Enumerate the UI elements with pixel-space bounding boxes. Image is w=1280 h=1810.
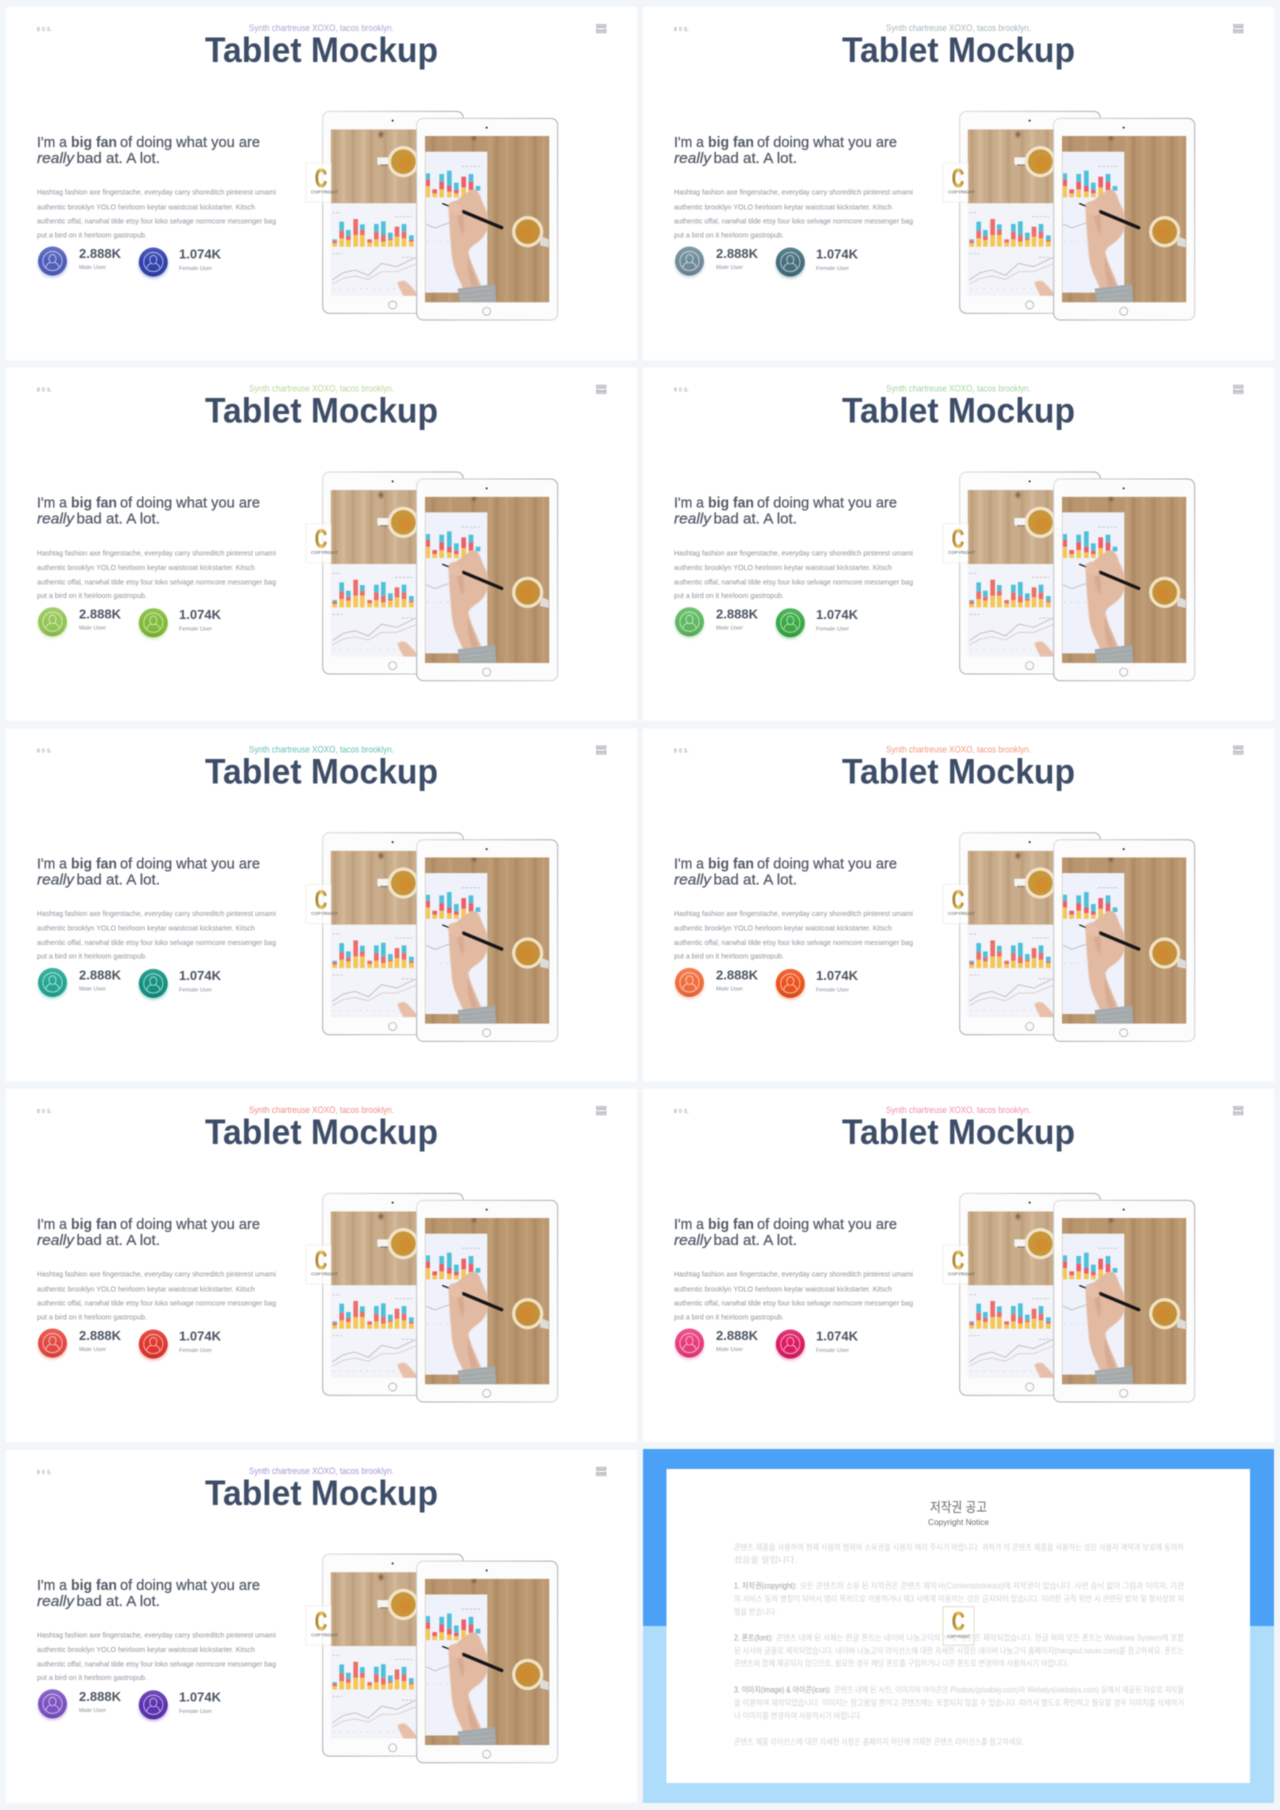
stat: male user: [79, 246, 122, 271]
stat: female user: 1.074K: [816, 246, 859, 262]
notice section 1: copyright: 의 서비스 등의 명칭이 되어서 영리 목적으로 이용하거나 제3 사에게 이용하는 것은 금지되어 있습니다. 이러한 규칙 위반 시 관련된 법적 및 형사상의 처: [734, 1594, 1184, 1604]
body text: [674, 548, 913, 600]
stat: male user: Male User: [716, 265, 743, 271]
copyright logo: C: [315, 1245, 327, 1275]
heading: I'm a: [674, 855, 705, 872]
copyright logo: C: [315, 884, 327, 914]
heading: really: [37, 871, 76, 888]
panel: tablet mockup slide 8 (pink): [643, 1089, 1274, 1442]
copyright logo: COPYRIGHT: [311, 550, 338, 555]
stat: female user: Female User: [179, 266, 212, 272]
notice section 2: font: 콘텐츠와 함께 제공되지 않으므로, 필요한 경우 해당 폰트를 구입하거나 다른 폰트로 변경하여 사용하시기 바랍니다.: [734, 1658, 1069, 1668]
heading: [674, 495, 897, 528]
panel: copyright notice: [643, 1449, 1274, 1803]
heading: I'm a: [37, 855, 68, 872]
stat: female user: Female User: [179, 627, 212, 633]
copyright logo: [306, 524, 338, 563]
body text: authentic offal, narwhal tilde etsy four loko selvage normcore messenger bag: [37, 577, 276, 586]
panel: tablet mockup slide 7 (red): [6, 1089, 637, 1442]
copyright logo: COPYRIGHT: [948, 190, 975, 194]
body text: Hashtag fashion axe fingerstache, everyday carry shoreditch pinterest umami: [37, 548, 276, 557]
notice section 2: font: 콘텐츠 내에 된 서체는 한글 폰트는 네이버 나눔고딕의 서체, 영문은 제작되었습니다. 한글 외의 모든 폰트는 Windows System에 포함: [776, 1632, 1185, 1642]
heading: I'm a: [37, 1577, 68, 1594]
body text: put a bird on it heirloom gastropub.: [37, 1312, 147, 1321]
body text: Hashtag fashion axe fingerstache, everyday carry shoreditch pinterest umami: [674, 188, 913, 197]
stat: female user: 1.074K: [179, 1328, 222, 1344]
title: Tablet Mockup: [842, 1113, 1075, 1152]
heading: bad at. A lot.: [714, 511, 797, 528]
heading: [37, 1216, 260, 1249]
heading: big fan: [71, 495, 117, 512]
stat: female user: Female User: [816, 1348, 849, 1354]
copyright logo: [943, 1606, 974, 1645]
title: Tablet Mockup: [842, 752, 1075, 791]
stat: female user: Female User: [816, 987, 849, 993]
notice section 2: font: [734, 1632, 1185, 1668]
icon: male user: [38, 968, 67, 998]
heading: I'm a: [37, 134, 68, 151]
body text: Hashtag fashion axe fingerstache, everyday carry shoreditch pinterest umami: [674, 909, 913, 918]
stat: male user: 2.888K: [79, 1328, 122, 1343]
heading: really: [37, 511, 76, 528]
icon: stack menu: [596, 1467, 606, 1476]
notice section 3: image and icon: 콘텐츠 내에 된 사진, 이미지와 아이콘은 Pixabay(pixabay.com)와 Webalys(webalys.com) 등에서 제공된 자료로 저작물: [834, 1684, 1184, 1694]
heading: really: [674, 871, 713, 888]
heading: of doing what you are: [120, 855, 260, 872]
copyright logo: C: [952, 1245, 964, 1275]
notice section 3: image and icon: [734, 1684, 1184, 1720]
stat: male user: 2.888K: [79, 246, 122, 261]
icon: female user: [139, 248, 168, 278]
stat: female user: [179, 607, 222, 633]
body text: [674, 1270, 913, 1321]
icon: stack menu: [1234, 24, 1243, 33]
stat: female user: Female User: [179, 987, 212, 993]
page number: 8 0 S.: [37, 388, 52, 394]
copyright logo: [306, 1245, 338, 1284]
stat: female user: Female User: [179, 1348, 212, 1354]
panel: tablet mockup slide 9 (purple): [6, 1450, 637, 1803]
title: Tablet Mockup: [842, 392, 1075, 431]
copyright logo: C: [952, 524, 964, 554]
copyright logo: [943, 1245, 975, 1284]
stat: male user: 2.888K: [716, 967, 759, 982]
stat: female user: 1.074K: [816, 607, 859, 622]
notice section 3: image and icon: 3. 이미지(image) & 아이콘(icon):: [734, 1684, 831, 1694]
icon: male user: [675, 246, 704, 277]
stat: female user: 1.074K: [179, 1689, 222, 1704]
notice section 1: copyright: 벌을 받습니다.: [734, 1606, 777, 1616]
heading: of doing what you are: [120, 495, 260, 512]
icon: stack menu: [1234, 746, 1243, 754]
heading: of doing what you are: [757, 495, 897, 512]
body text: put a bird on it heirloom gastropub.: [37, 591, 147, 600]
body text: authentic brooklyn YOLO heirloom keytar waistcoat kickstarter. Kitsch: [37, 1284, 255, 1293]
icon: male user: [38, 1689, 67, 1720]
heading: [37, 1577, 260, 1610]
stat: female user: [179, 968, 222, 993]
heading: really: [37, 1232, 76, 1249]
body text: authentic brooklyn YOLO heirloom keytar waistcoat kickstarter. Kitsch: [37, 1645, 255, 1654]
stat: male user: [79, 1689, 122, 1714]
tablet mockup: [323, 833, 558, 1041]
copyright logo: COPYRIGHT: [311, 190, 338, 194]
body text: authentic offal, narwhal tilde etsy four loko selvage normcore messenger bag: [37, 217, 276, 226]
heading: bad at. A lot.: [76, 511, 160, 528]
stat: male user: 2.888K: [716, 1328, 759, 1343]
heading: bad at. A lot.: [76, 1593, 160, 1610]
body text: authentic brooklyn YOLO heirloom keytar waistcoat kickstarter. Kitsch: [674, 563, 892, 572]
notice intro: 콘텐츠 제품을 사용하여 현재 사용의 범위와 소유권을 사용자 여러 주시기 바랍니다. 귀하가 이 콘텐츠 제품을 사용하는 것은 사용자 계약과 보호에 동의하: [734, 1542, 1185, 1552]
icon: female user: [776, 248, 805, 278]
icon: female user: [776, 608, 805, 639]
title: Tablet Mockup: [205, 392, 438, 431]
body text: authentic offal, narwhal tilde etsy four loko selvage normcore messenger bag: [37, 938, 276, 947]
heading: big fan: [71, 855, 117, 872]
stat: female user: 1.074K: [179, 607, 222, 622]
body text: put a bird on it heirloom gastropub.: [674, 230, 784, 239]
icon: male user: [675, 607, 704, 638]
copyright logo: C: [952, 884, 964, 914]
stat: male user: [79, 967, 122, 992]
heading: really: [37, 150, 76, 167]
heading: bad at. A lot.: [714, 1232, 797, 1249]
page number: 8 0 S.: [37, 27, 52, 33]
stat: female user: [179, 246, 222, 272]
body text: authentic offal, narwhal tilde etsy four loko selvage normcore messenger bag: [674, 217, 913, 226]
body text: [37, 1630, 276, 1682]
panel: tablet mockup slide 5 (teal): [6, 728, 637, 1081]
copyright logo: C: [315, 1606, 327, 1636]
heading: I'm a: [674, 1216, 705, 1233]
stat: female user: Female User: [816, 266, 849, 272]
subtitle: Synth chartreuse XOXO, tacos brooklyn.: [249, 384, 394, 395]
icon: male user: [38, 1328, 67, 1359]
stat: male user: [716, 1328, 759, 1353]
tablet mockup: [323, 1193, 558, 1402]
heading: really: [674, 511, 713, 528]
stat: male user: Male User: [79, 265, 106, 271]
stat: female user: [179, 1689, 222, 1715]
stat: female user: 1.074K: [179, 968, 222, 983]
tablet mockup: [323, 111, 558, 320]
body text: [37, 548, 276, 600]
icon: male user: [675, 1328, 704, 1359]
tablet mockup: [960, 111, 1195, 320]
subtitle: Synth chartreuse XOXO, tacos brooklyn.: [249, 1466, 394, 1477]
body text: authentic brooklyn YOLO heirloom keytar waistcoat kickstarter. Kitsch: [37, 202, 255, 211]
body text: authentic offal, narwhal tilde etsy four loko selvage normcore messenger bag: [674, 938, 913, 947]
copyright logo: C: [315, 524, 327, 554]
heading: big fan: [71, 1577, 117, 1594]
heading: big fan: [708, 855, 754, 872]
body text: [674, 909, 913, 961]
subtitle: Synth chartreuse XOXO, tacos brooklyn.: [886, 384, 1031, 395]
stat: male user: [716, 607, 759, 632]
body text: [37, 909, 276, 961]
notice subheading: Copyright Notice: [928, 1517, 989, 1527]
body text: [37, 1270, 276, 1321]
heading: really: [674, 1232, 713, 1249]
heading: big fan: [708, 1216, 754, 1233]
body text: authentic brooklyn YOLO heirloom keytar waistcoat kickstarter. Kitsch: [674, 202, 892, 211]
stat: male user: [716, 246, 759, 271]
body text: authentic offal, narwhal tilde etsy four loko selvage normcore messenger bag: [674, 577, 913, 586]
body text: put a bird on it heirloom gastropub.: [37, 1673, 147, 1682]
stat: male user: [79, 607, 122, 632]
body text: Hashtag fashion axe fingerstache, everyday carry shoreditch pinterest umami: [37, 188, 276, 197]
heading: bad at. A lot.: [76, 871, 160, 888]
copyright logo: COPYRIGHT: [311, 1272, 338, 1276]
subtitle: Synth chartreuse XOXO, tacos brooklyn.: [249, 23, 394, 34]
notice intro: 셨음을 알립니다.: [734, 1554, 797, 1564]
tablet mockup: [323, 1554, 558, 1763]
stat: male user: 2.888K: [79, 1689, 122, 1704]
notice section 3: image and icon: 나 이미지를 변경하여 사용하시기 바랍니다.: [734, 1710, 862, 1720]
body text: authentic offal, narwhal tilde etsy four loko selvage normcore messenger bag: [37, 1660, 276, 1669]
body text: [37, 188, 276, 239]
title: Tablet Mockup: [205, 752, 438, 791]
tablet mockup: [960, 1193, 1195, 1402]
icon: male user: [38, 607, 67, 638]
body text: Hashtag fashion axe fingerstache, everyday carry shoreditch pinterest umami: [37, 1631, 276, 1640]
heading: I'm a: [674, 134, 705, 151]
copyright logo: [306, 884, 338, 923]
body text: put a bird on it heirloom gastropub.: [37, 952, 147, 961]
stat: male user: 2.888K: [79, 967, 122, 982]
heading: big fan: [708, 134, 754, 151]
body text: Hashtag fashion axe fingerstache, everyday carry shoreditch pinterest umami: [674, 1270, 913, 1279]
heading: [37, 855, 260, 888]
page number: 8 0 S.: [674, 27, 689, 33]
stat: male user: Male User: [716, 626, 743, 632]
heading: of doing what you are: [757, 855, 897, 872]
subtitle: Synth chartreuse XOXO, tacos brooklyn.: [886, 1105, 1031, 1116]
body text: put a bird on it heirloom gastropub.: [674, 1312, 784, 1321]
body text: authentic brooklyn YOLO heirloom keytar waistcoat kickstarter. Kitsch: [674, 1284, 892, 1293]
heading: bad at. A lot.: [714, 150, 797, 167]
notice intro: [734, 1542, 1185, 1564]
panel: tablet mockup slide 1 (indigo): [6, 7, 637, 360]
stat: female user: [816, 246, 859, 272]
title: Tablet Mockup: [205, 1474, 438, 1513]
copyright logo: [306, 163, 338, 202]
body text: authentic brooklyn YOLO heirloom keytar waistcoat kickstarter. Kitsch: [37, 924, 255, 933]
body text: put a bird on it heirloom gastropub.: [674, 952, 784, 961]
copyright logo: COPYRIGHT: [948, 550, 975, 555]
icon: female user: [139, 1330, 168, 1360]
copyright logo: COPYRIGHT: [311, 1632, 338, 1637]
stat: female user: 1.074K: [816, 968, 859, 983]
notice section 1: copyright: 모든 콘텐츠의 소유 된 저작권은 콘텐츠 제작사(Contentstokeout)에 저작권이 있습니다. 사전 승낙 없이 그림과 이미지, 기관: [800, 1580, 1185, 1590]
body text: Hashtag fashion axe fingerstache, everyday carry shoreditch pinterest umami: [37, 909, 276, 918]
subtitle: Synth chartreuse XOXO, tacos brooklyn.: [886, 744, 1031, 755]
heading: of doing what you are: [120, 1216, 260, 1233]
icon: stack menu: [596, 24, 606, 33]
panel: tablet mockup slide 2 (slate): [643, 7, 1274, 360]
stat: male user: 2.888K: [716, 246, 759, 261]
page number: 8 0 S.: [37, 748, 52, 754]
heading: of doing what you are: [757, 134, 897, 151]
copyright logo: [943, 884, 975, 923]
subtitle: Synth chartreuse XOXO, tacos brooklyn.: [249, 744, 394, 755]
heading: [37, 134, 260, 167]
icon: stack menu: [596, 746, 606, 754]
heading: bad at. A lot.: [76, 1232, 160, 1249]
heading: [674, 855, 897, 888]
copyright logo: COPYRIGHT: [947, 1634, 970, 1639]
notice section 3: image and icon: 을 이용하여 제작되었습니다. 이미지는 참고용일 뿐이고 콘텐츠에는 포함되지 않을 수 있습니다. 따라서 별도로 확인하고 필요할 경우 이미지를 삭제하거: [734, 1698, 1184, 1708]
stat: male user: Male User: [716, 986, 743, 992]
copyright logo: C: [952, 1606, 965, 1636]
stat: male user: 2.888K: [79, 607, 122, 622]
stat: female user: 1.074K: [816, 1328, 859, 1344]
heading: big fan: [71, 134, 117, 151]
page number: 8 0 S.: [37, 1470, 52, 1476]
stat: male user: 2.888K: [716, 607, 759, 622]
tablet mockup: [323, 472, 558, 681]
icon: male user: [675, 968, 704, 998]
notice section 1: copyright: [734, 1580, 1185, 1616]
heading: [37, 495, 260, 528]
heading: really: [674, 150, 713, 167]
icon: stack menu: [596, 1106, 606, 1115]
stat: female user: [816, 1328, 859, 1354]
panel: tablet mockup slide 3 (lime): [6, 368, 637, 721]
copyright logo: [306, 1606, 338, 1645]
icon: female user: [776, 969, 805, 999]
panel: tablet mockup slide 6 (orange): [643, 728, 1274, 1081]
notice section 2: font: 2. 폰트(font):: [734, 1634, 773, 1642]
body text: authentic offal, narwhal tilde etsy four loko selvage normcore messenger bag: [674, 1299, 913, 1308]
notice heading: 저작권 공고: [930, 1500, 987, 1515]
copyright logo: [943, 163, 975, 202]
body text: put a bird on it heirloom gastropub.: [37, 230, 147, 239]
subtitle: Synth chartreuse XOXO, tacos brooklyn.: [249, 1105, 394, 1116]
notice section 2: font: 된 사서와 글꼴로 제작되었습니다. 네이버 나눔고딕 라이선스에 대한 자세한 사항은 네이버 나눔고딕 홈페이지(hangeul.naver.com)를 참고하세요. 폰트는: [734, 1646, 1184, 1656]
heading: bad at. A lot.: [76, 150, 160, 167]
body text: Hashtag fashion axe fingerstache, everyday carry shoreditch pinterest umami: [674, 548, 913, 557]
title: Tablet Mockup: [205, 31, 438, 70]
tablet mockup: [960, 472, 1195, 681]
notice section 1: copyright: 1. 저작권(copyright):: [734, 1580, 797, 1590]
copyright logo: [943, 524, 975, 563]
stat: female user: Female User: [816, 627, 849, 633]
stat: male user: Male User: [79, 1708, 106, 1714]
heading: big fan: [71, 1216, 117, 1233]
stat: female user: Female User: [179, 1709, 212, 1715]
stat: male user: Male User: [79, 626, 106, 632]
icon: stack menu: [1234, 385, 1243, 394]
page number: 8 0 S.: [674, 388, 689, 394]
heading: big fan: [708, 495, 754, 512]
page number: 8 0 S.: [674, 748, 689, 754]
copyright logo: COPYRIGHT: [948, 911, 975, 916]
stat: male user: [79, 1328, 122, 1353]
stat: male user: Male User: [79, 1347, 106, 1353]
copyright logo: COPYRIGHT: [311, 911, 338, 916]
body text: put a bird on it heirloom gastropub.: [674, 591, 784, 600]
heading: of doing what you are: [120, 1577, 260, 1594]
heading: [674, 134, 897, 167]
stat: female user: 1.074K: [179, 246, 222, 262]
body text: [674, 188, 913, 239]
stat: female user: [816, 968, 859, 993]
copyright logo: C: [315, 163, 327, 193]
stat: female user: [179, 1328, 222, 1354]
heading: of doing what you are: [757, 1216, 897, 1233]
title: Tablet Mockup: [205, 1113, 438, 1152]
body text: authentic brooklyn YOLO heirloom keytar waistcoat kickstarter. Kitsch: [37, 563, 255, 572]
page number: 8 0 S.: [37, 1109, 52, 1115]
heading: bad at. A lot.: [714, 871, 797, 888]
page number: 8 0 S.: [674, 1109, 689, 1115]
icon: stack menu: [596, 385, 606, 394]
body text: authentic offal, narwhal tilde etsy four loko selvage normcore messenger bag: [37, 1299, 276, 1308]
notice footer: 콘텐츠 제품 라이선스에 대한 자세한 사항은 홈페이지 하단에 기재한 콘텐츠 라이선스를 참고하세요.: [734, 1736, 1024, 1746]
heading: of doing what you are: [120, 134, 260, 151]
stat: male user: Male User: [716, 1347, 743, 1353]
stat: male user: Male User: [79, 986, 106, 992]
body text: Hashtag fashion axe fingerstache, everyday carry shoreditch pinterest umami: [37, 1270, 276, 1279]
stat: female user: [816, 607, 859, 633]
heading: I'm a: [37, 495, 68, 512]
icon: female user: [139, 969, 168, 999]
tablet mockup: [960, 833, 1195, 1041]
body text: authentic brooklyn YOLO heirloom keytar waistcoat kickstarter. Kitsch: [674, 924, 892, 933]
copyright logo: C: [952, 163, 964, 193]
stat: male user: [716, 967, 759, 992]
icon: female user: [139, 608, 168, 639]
panel: tablet mockup slide 4 (green): [643, 368, 1274, 721]
heading: really: [37, 1593, 76, 1610]
subtitle: Synth chartreuse XOXO, tacos brooklyn.: [886, 23, 1031, 34]
copyright logo: COPYRIGHT: [948, 1272, 975, 1276]
heading: I'm a: [674, 495, 705, 512]
icon: female user: [139, 1690, 168, 1721]
icon: stack menu: [1234, 1106, 1243, 1115]
icon: female user: [776, 1330, 805, 1360]
title: Tablet Mockup: [842, 31, 1075, 70]
heading: I'm a: [37, 1216, 68, 1233]
heading: [674, 1216, 897, 1249]
icon: male user: [38, 246, 67, 277]
